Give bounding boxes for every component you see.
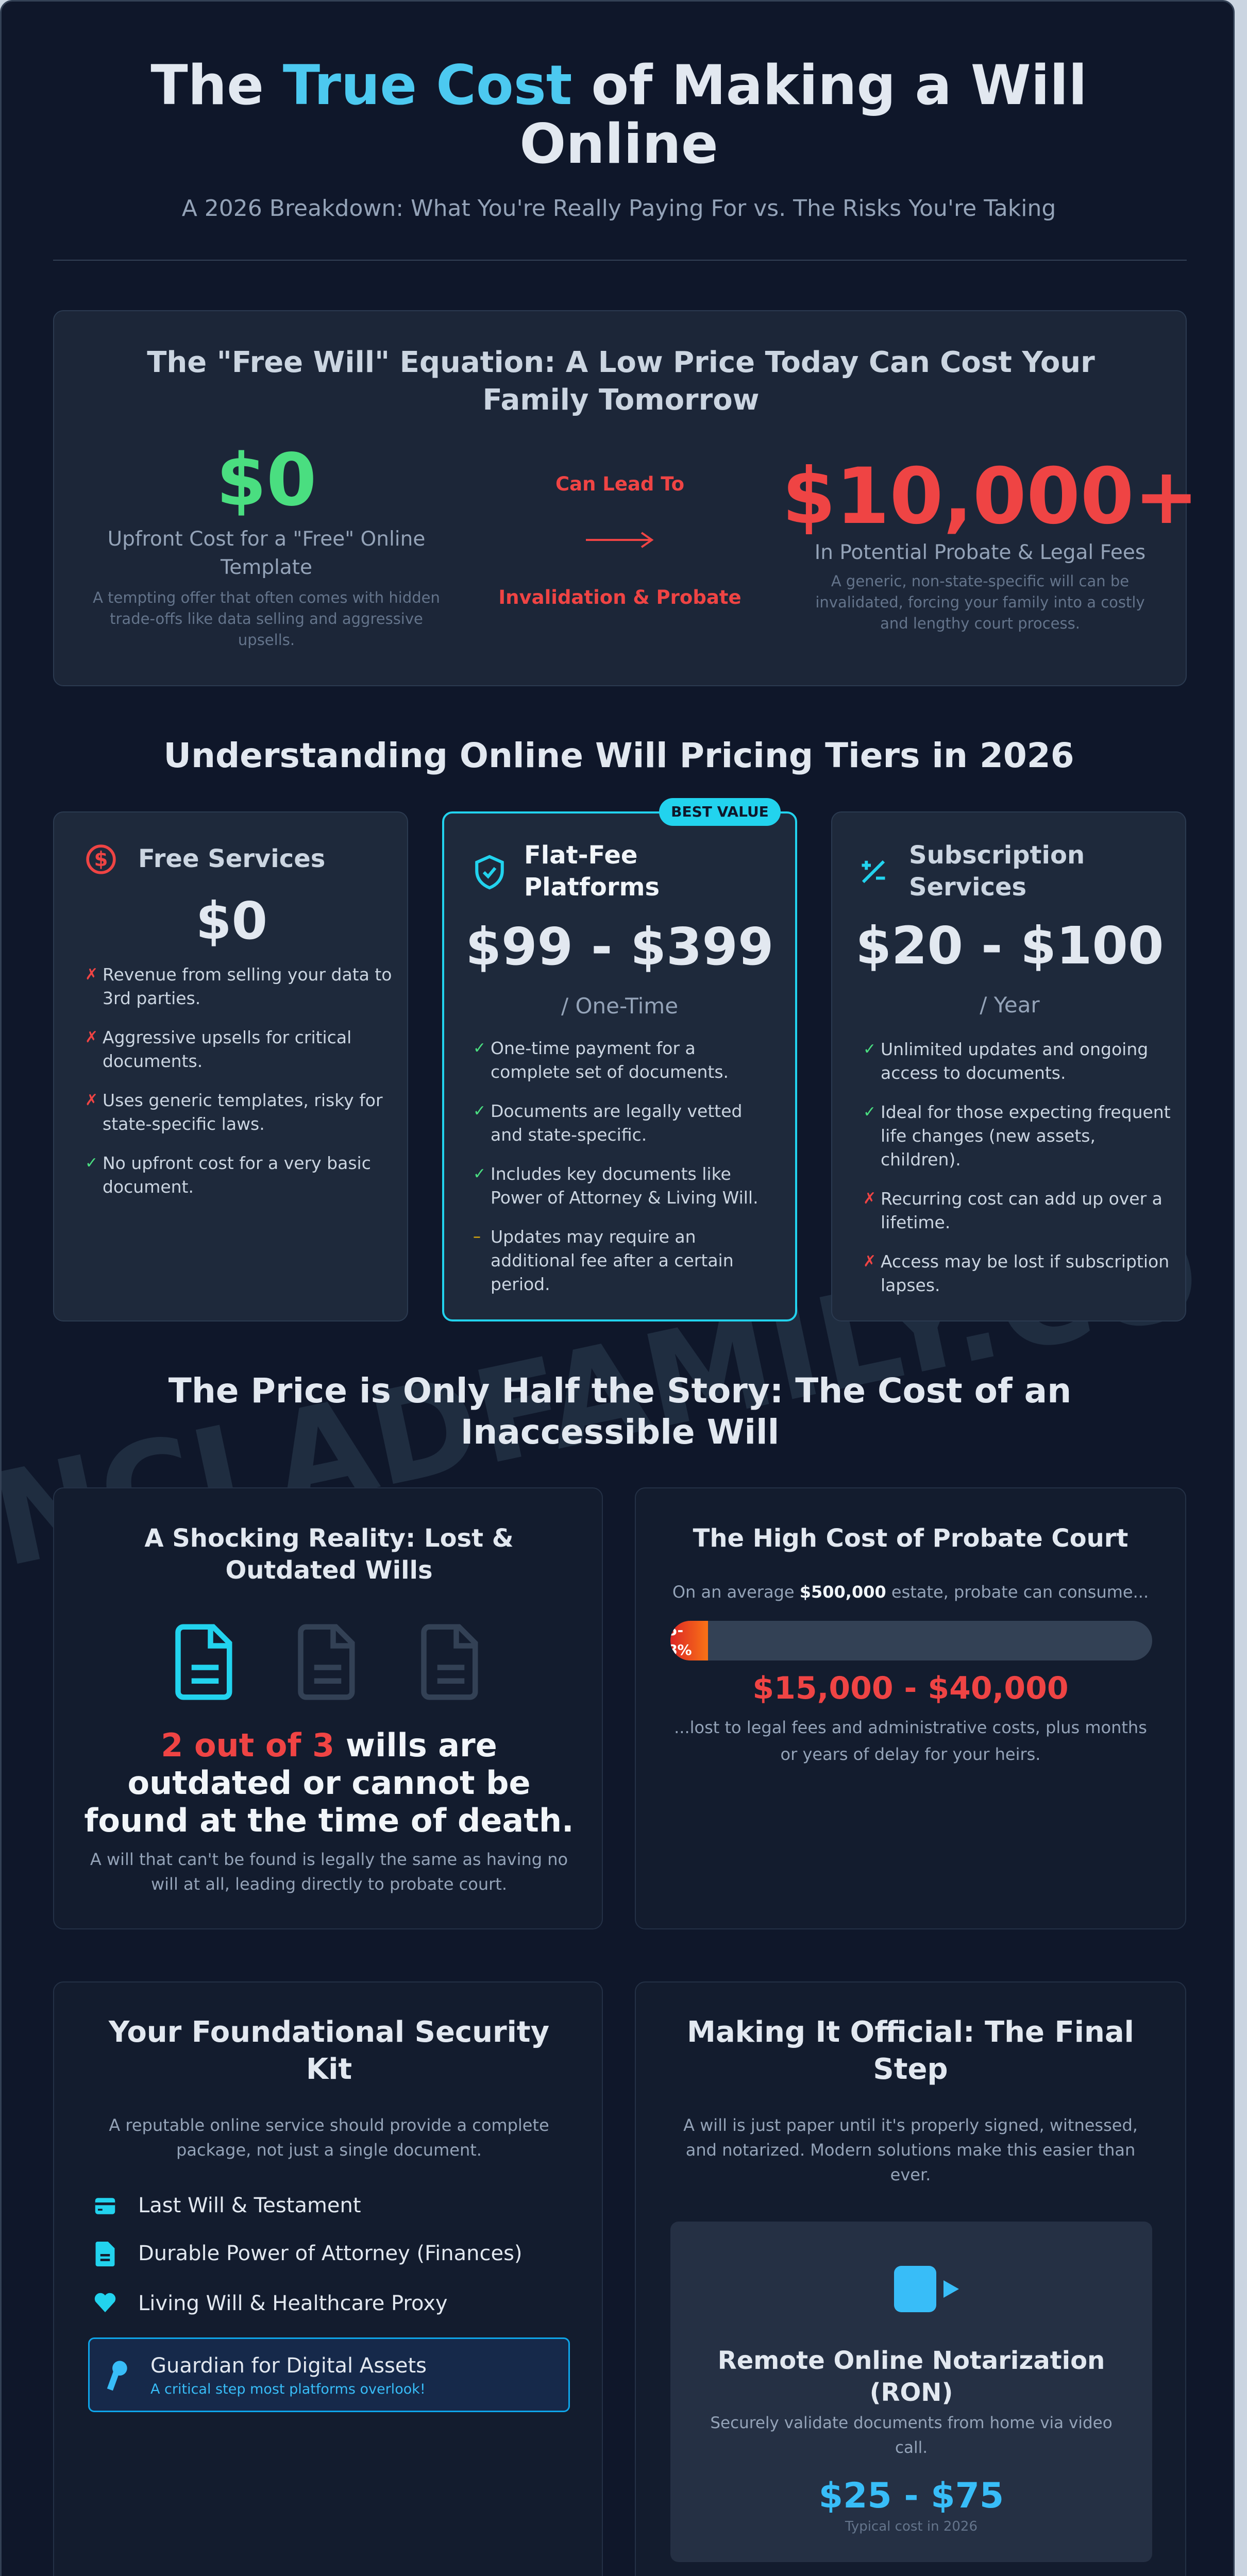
- tier title: Platforms: [524, 873, 660, 902]
- panel: subscription: / Year: [980, 992, 1040, 1018]
- column: $0: [93, 438, 440, 649]
- tier title: [909, 841, 1085, 902]
- icon: percent: [862, 860, 885, 883]
- column: $10,000+: [782, 452, 1199, 632]
- panel: subscription: [831, 811, 1186, 1321]
- icon: shield: [475, 855, 504, 889]
- icons: documents: [175, 1624, 478, 1700]
- feature list: ✓: [473, 1039, 486, 1057]
- feature list: Includes key documents like Power of Attorney & Living Will.: [491, 1164, 759, 1208]
- feature list: ✓: [473, 1102, 486, 1120]
- callout: digital assets: Guardian for Digital Assets: [150, 2354, 427, 2378]
- feature list: Ideal for those expecting frequent life changes (new assets, children).: [881, 1102, 1171, 1170]
- tier title: Services: [909, 873, 1026, 902]
- panel: probate cost: [635, 1487, 1186, 1929]
- column: $0: $0: [216, 438, 316, 522]
- arrow: leads to: [498, 473, 742, 608]
- feature list: [863, 1039, 1171, 1295]
- feature list: ✗: [85, 1091, 98, 1109]
- feature list: ✗: [863, 1252, 876, 1270]
- icon: id card: [95, 2198, 115, 2214]
- panel: flat-fee: [442, 811, 797, 1321]
- feature list: Updates may require an additional fee after a certain period.: [491, 1227, 734, 1294]
- tier title: Subscription: [909, 841, 1085, 870]
- arrow: leads to: Can Lead To: [555, 473, 684, 495]
- description: ever.: [890, 2165, 931, 2184]
- heading: price is only half the story: The Price is Only Half the Story: The Cost of an Inaccessible Will: [168, 1371, 1071, 1452]
- feature list: Recurring cost can add up over a lifetime.: [881, 1189, 1162, 1232]
- description: [683, 2115, 1138, 2184]
- bar chart: [670, 1621, 1152, 1660]
- feature list: ✗: [863, 1190, 876, 1208]
- callout: RON: [670, 2222, 1152, 2562]
- feature list: ✗: [85, 965, 98, 984]
- feature list: One-time payment for a complete set of documents.: [491, 1038, 729, 1082]
- callout: RON: $25 - $75: [819, 2476, 1004, 2516]
- feature list: No upfront cost for a very basic document.: [103, 1153, 371, 1197]
- watermark: NCLADFAMILY.CO: [0, 1194, 1212, 1596]
- tier title: [524, 841, 660, 902]
- icon: heart: [95, 2293, 115, 2312]
- heading: pricing tiers: Understanding Online Will Pricing Tiers in 2026: [163, 736, 1074, 775]
- panel heading: The "Free Will" Equation: A Low Price Today Can Cost Your Family Tomorrow: [147, 346, 1095, 417]
- badge: best value: BEST VALUE: [671, 803, 769, 820]
- feature list: Aggressive upsells for critical documents.: [103, 1027, 351, 1071]
- description: A will is just paper until it's properly signed, witnessed,: [683, 2115, 1138, 2135]
- icon: dollar off: [86, 844, 116, 874]
- callout: RON: Securely validate documents from home via video call.: [710, 2414, 1113, 2457]
- column: $10,000+: $10,000+: [782, 452, 1199, 541]
- column: $10,000+: A generic, non-state-specific will can be invalidated, forcing your family into a costly and lengthy court process.: [815, 572, 1145, 632]
- panel: flat-fee: / One-Time: [561, 993, 678, 1019]
- badge: best value: [659, 798, 781, 826]
- kit list: Last Will & Testament: [138, 2194, 361, 2217]
- feature list: ✗: [85, 1028, 98, 1046]
- kit list: Durable Power of Attorney (Finances): [138, 2242, 523, 2265]
- description: A reputable online service should provide a complete package, not just a single document.: [109, 2115, 549, 2160]
- value: $15,000 - $40,000: [752, 1670, 1069, 1706]
- subtitle: On an average $500,000 estate, probate can consume...: [672, 1582, 1149, 1602]
- feature list: ✓: [85, 1154, 98, 1172]
- feature list: [85, 964, 392, 1197]
- callout: RON: Typical cost in 2026: [845, 2519, 978, 2534]
- callout: digital assets: A critical step most platforms overlook!: [150, 2381, 426, 2397]
- panel title: Your Foundational Security Kit: [109, 2015, 549, 2086]
- price: $20 - $100: [855, 916, 1164, 976]
- feature list: ✓: [863, 1103, 876, 1121]
- feature list: Uses generic templates, risky for state-specific laws.: [103, 1090, 383, 1134]
- price: $0: [196, 891, 267, 951]
- icon: dollar off: $: [94, 848, 108, 871]
- feature list: Access may be lost if subscription lapses.: [881, 1251, 1169, 1295]
- icon: file: [96, 2242, 114, 2266]
- feature list: –: [473, 1228, 481, 1246]
- kit list: [95, 2194, 523, 2315]
- feature list: ✓: [473, 1165, 486, 1183]
- panel: free will equation: [53, 310, 1187, 686]
- note: A will that can't be found is legally the same as having no will at all, leading directly to probate court.: [90, 1850, 568, 1894]
- panel: lost wills: [53, 1487, 603, 1929]
- panel title: Making It Official: The Final Step: [687, 2015, 1134, 2086]
- panel: making it official: [635, 1981, 1186, 2576]
- statistic: 2 out of 3 wills are outdated or cannot be found at the time of death.: [84, 1726, 574, 1839]
- feature list: Revenue from selling your data to 3rd parties.: [103, 964, 392, 1008]
- kit list: Living Will & Healthcare Proxy: [138, 2292, 448, 2315]
- column: $0: Upfront Cost for a "Free" Online Template: [108, 528, 425, 579]
- column: $0: A tempting offer that often comes with hidden trade-offs like data selling and aggressive upsells.: [93, 589, 440, 649]
- description: and notarized. Modern solutions make this easier than: [686, 2140, 1135, 2160]
- title: The True Cost of Making a Will Online: [150, 54, 1087, 176]
- callout: RON: (RON): [870, 2378, 953, 2407]
- callout: digital assets: [88, 2337, 570, 2412]
- panel title: The High Cost of Probate Court: [693, 1524, 1128, 1553]
- arrow: leads to: Invalidation & Probate: [498, 586, 742, 608]
- icon: video: [894, 2266, 959, 2312]
- subtitle: A 2026 Breakdown: What You're Really Paying For vs. The Risks You're Taking: [182, 195, 1056, 222]
- feature list: Documents are legally vetted and state-specific.: [491, 1101, 742, 1145]
- panel title: A Shocking Reality: Lost & Outdated Wills: [144, 1524, 514, 1585]
- column: $10,000+: In Potential Probate & Legal Fees: [815, 541, 1145, 564]
- tier title: Flat-Fee: [524, 841, 637, 870]
- note: ...lost to legal fees and administrative costs, plus months or years of delay for your heirs.: [674, 1718, 1147, 1764]
- feature list: [473, 1038, 759, 1294]
- tier title: Free Services: [138, 844, 325, 873]
- price: $99 - $399: [465, 917, 774, 977]
- callout: RON: Remote Online Notarization: [718, 2346, 1105, 2375]
- feature list: ✓: [863, 1040, 876, 1058]
- panel: security kit: [53, 1981, 603, 2576]
- panel: free services: [53, 811, 408, 1321]
- feature list: Unlimited updates and ongoing access to documents.: [881, 1039, 1148, 1083]
- icon: key: [107, 2361, 127, 2391]
